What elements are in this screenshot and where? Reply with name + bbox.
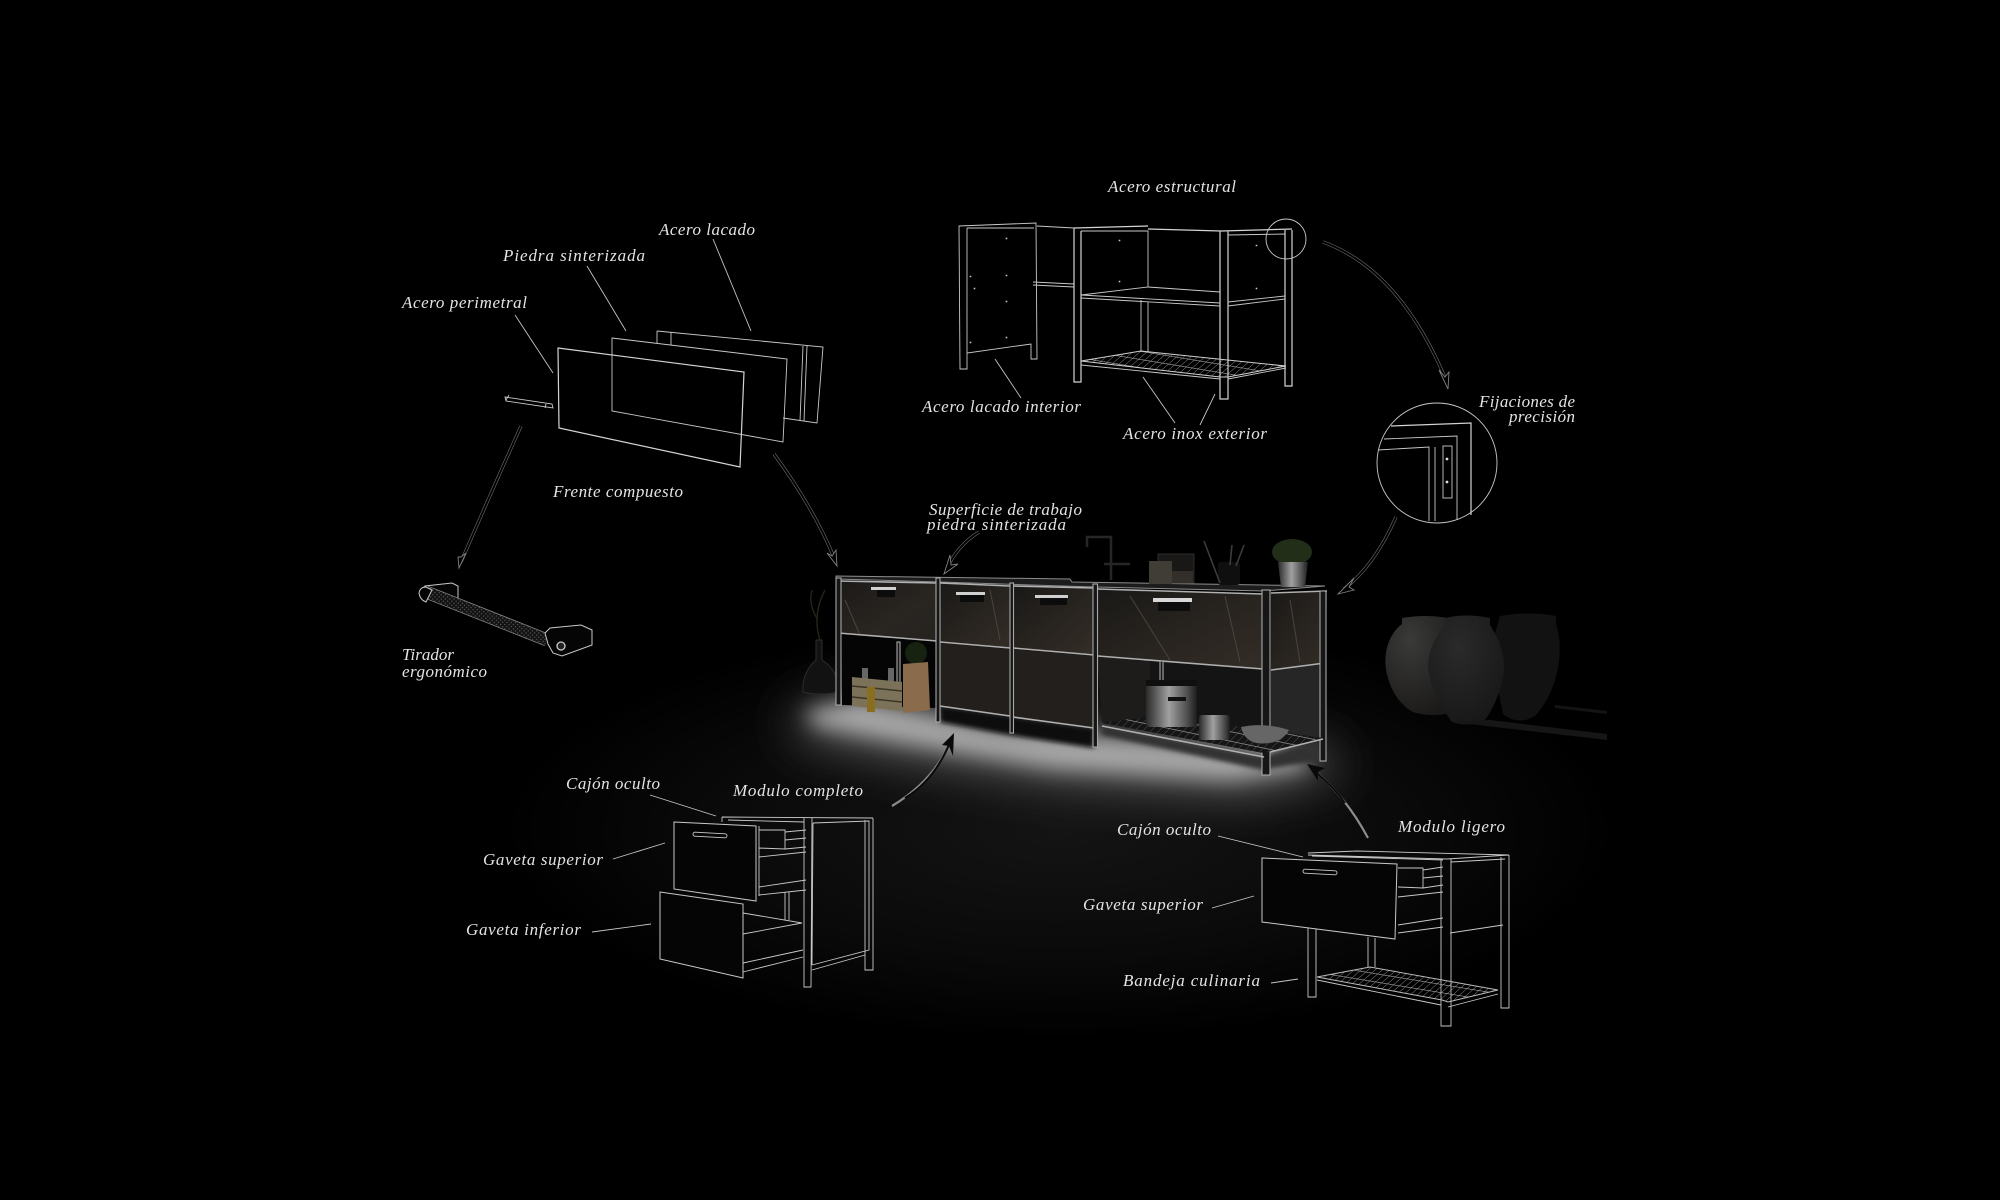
middle panel: sintered stone	[612, 338, 787, 442]
carcass	[1308, 851, 1509, 1026]
arrow: detail to island	[1338, 517, 1396, 594]
label: Frente compuesto: Frente compuesto	[552, 482, 683, 501]
leaders: complete module	[592, 795, 716, 932]
label: Bandeja culinaria: Bandeja culinaria	[1123, 971, 1260, 990]
label: Gaveta inferior: Gaveta inferior	[466, 920, 581, 939]
label: Modulo completo: Modulo completo	[732, 781, 863, 800]
upper drawer	[674, 822, 756, 901]
upper handle	[693, 832, 727, 838]
worktop	[836, 576, 1325, 591]
leaders: front panels	[515, 239, 751, 373]
label: Cajón oculto (light): Cajón oculto	[1117, 820, 1211, 839]
paper bag with plant	[903, 642, 930, 713]
ergonomic handle	[419, 583, 592, 656]
shelf and inner panel	[1081, 231, 1285, 352]
shadows under cabinets	[940, 706, 1094, 748]
lower drawer internals	[743, 892, 803, 972]
arrow: front to island	[774, 454, 837, 566]
steel frame lines	[838, 581, 1327, 728]
precision fixing detail	[1377, 403, 1497, 523]
cabinet legs	[836, 578, 841, 705]
lower rails	[1081, 365, 1286, 379]
label: Modulo ligero: Modulo ligero	[1397, 817, 1505, 836]
drawer front	[1262, 858, 1397, 939]
label: Superficie de trabajo piedra sinterizada: Superficie de trabajo	[929, 500, 1082, 519]
label: Gaveta superior (complete): Gaveta superior	[483, 850, 603, 869]
label: Acero estructural: Acero estructural	[1107, 177, 1236, 196]
faucet	[1087, 537, 1130, 580]
utensil holder	[1204, 541, 1244, 585]
light module drawing	[1262, 851, 1509, 1026]
plant twig	[811, 590, 825, 640]
wire tray	[1317, 967, 1498, 1002]
label: Acero lacado: Acero lacado	[658, 220, 755, 239]
leaders: structural frame	[995, 359, 1215, 425]
label: Tirador ergonómico: Tirador	[402, 645, 454, 664]
dark glass vase	[803, 640, 838, 694]
arrow: frame to precision fixings	[1323, 242, 1449, 389]
label: Piedra sinterizada: Piedra sinterizada	[502, 246, 645, 265]
lower drawer	[660, 892, 743, 978]
wire grate	[1081, 351, 1286, 377]
cabinet fronts	[838, 581, 937, 641]
structural frame	[959, 219, 1306, 399]
upper drawer internals	[759, 826, 806, 896]
open door	[959, 223, 1074, 369]
dim floor of the kitchen scene	[500, 620, 1620, 1040]
drawer handle	[1303, 869, 1337, 875]
exploded front panels	[505, 331, 823, 467]
label: Cajón oculto (complete): Cajón oculto	[566, 774, 660, 793]
label: Acero lacado interior: Acero lacado interior	[921, 397, 1081, 416]
back panel: lacquered steel	[657, 331, 823, 423]
wooden crate with bottles	[852, 668, 902, 712]
drawer internals	[1398, 867, 1443, 933]
label: Acero perimetral: Acero perimetral	[401, 293, 527, 312]
label: Superficie de trabajo piedra sinterizada: piedra sinterizada	[926, 515, 1066, 534]
leaders: light module	[1212, 836, 1303, 983]
glass jars	[1149, 554, 1194, 584]
front panel: perimeter steel	[558, 348, 744, 467]
arrow: light module to island	[1307, 764, 1368, 838]
large stock pot	[1146, 680, 1197, 727]
back wall of open sections	[842, 635, 937, 708]
label: Fijaciones de precisión: Fijaciones de	[1478, 392, 1575, 411]
open floor section under module 4	[1097, 656, 1263, 753]
small handle	[505, 395, 553, 408]
carcass	[722, 817, 873, 987]
label: Tirador ergonómico: ergonómico	[402, 662, 487, 681]
label: Fijaciones de precisión: precisión	[1508, 407, 1575, 426]
label: Acero inox exterior: Acero inox exterior	[1122, 424, 1267, 443]
wire shelf	[1102, 715, 1323, 757]
frame posts and rails	[1074, 226, 1292, 399]
tray rails	[1317, 980, 1498, 1007]
floor light pool	[790, 695, 1345, 795]
detail circle	[1266, 219, 1306, 259]
arrow: worktop callout	[944, 532, 979, 574]
door screws	[970, 238, 1257, 343]
arrow: complete module to island	[892, 733, 954, 806]
complete module drawing	[660, 817, 873, 987]
kitchen island	[803, 537, 1327, 775]
clay vases	[1385, 614, 1607, 740]
pan	[1241, 725, 1289, 743]
stone veins	[845, 590, 1300, 662]
arrow: front to handle	[458, 426, 521, 568]
label: Gaveta superior (light): Gaveta superior	[1083, 895, 1203, 914]
potted herb	[1272, 539, 1312, 587]
small pot	[1199, 715, 1230, 740]
drawer handles	[871, 587, 1192, 611]
